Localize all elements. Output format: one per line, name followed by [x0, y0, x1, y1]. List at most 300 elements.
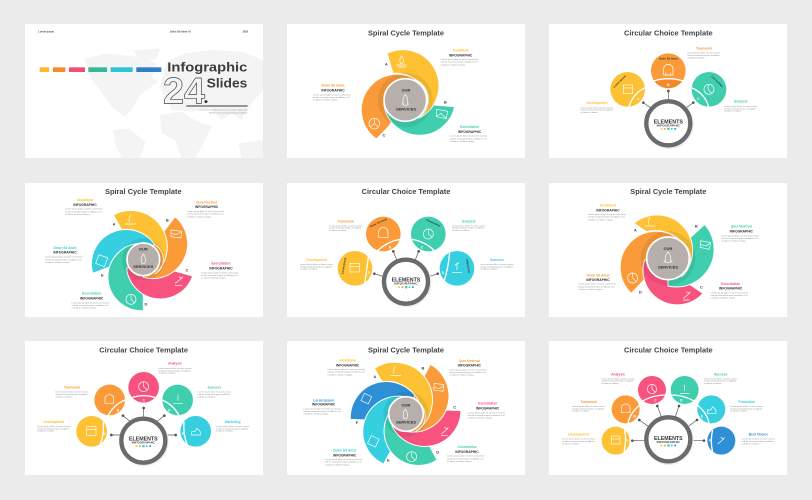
- text: Best Choice: Best Choice: [749, 433, 768, 437]
- text: Marketing: sed do eiusmod tempor incididunt: [216, 427, 249, 430]
- option circles: D: [168, 408, 171, 412]
- header labels: 2020: [242, 31, 249, 34]
- heading: Infographic Slides: [167, 60, 247, 91]
- text: Teamwork: [55, 386, 90, 398]
- text: Analysis: Analysis: [462, 219, 476, 223]
- letters: B: [166, 217, 169, 222]
- letters: A: [634, 228, 637, 233]
- text: Analysis: [724, 100, 758, 113]
- text: Success: ut labore et dolore: [704, 382, 722, 385]
- text: Exercitation: Exercitation: [478, 402, 497, 406]
- center ring: [382, 258, 431, 307]
- text: Exercitation: [450, 125, 488, 143]
- option circles: D: [680, 398, 683, 402]
- text: Incididunt: INFOGRAPHIC: [336, 363, 360, 367]
- text: Quis Nostrud: INFOGRAPHIC: [730, 229, 754, 233]
- option circles: F: [709, 439, 711, 443]
- text: Teamwork: [687, 46, 722, 59]
- letters: E: [387, 457, 390, 462]
- text: Marketing: Marketing: [225, 420, 241, 424]
- text: Teamwork: sed do eiusmod tempor incididunt: [55, 393, 88, 396]
- text: Development: Development: [568, 433, 590, 437]
- text: Success: [198, 386, 232, 398]
- title: Spiral Cycle Template: [630, 187, 706, 196]
- text: Exercitation: Lorem ipsum dolor sit amet consectetur: [468, 411, 506, 414]
- text: Teamwork: ut labore et dolore: [55, 395, 74, 398]
- center circle: [647, 237, 689, 280]
- text: Analysis: [158, 362, 193, 375]
- text: Analysis: sed do eiusmod tempor incididunt: [452, 227, 485, 230]
- text: Quis Nostrud: sed do eiusmod tempor incididunt ut la: [449, 371, 487, 374]
- text: Analysis: [601, 372, 636, 385]
- icons: [369, 56, 448, 129]
- text: Consectetur: sed do eiusmod tempor incididunt ut la: [447, 457, 485, 460]
- text: Quis Nostrud: ut labore et dolore magna: [721, 240, 747, 243]
- text: Incididunt: [588, 203, 626, 221]
- text: Best Choice: sed do eiusmod tempor incididunt: [742, 440, 774, 443]
- text: Quis Nostrud: ut labore et dolore magna: [187, 215, 212, 218]
- text: Development: Development: [306, 258, 328, 262]
- letters: D: [145, 301, 148, 306]
- text: Promotion: Promotion: [738, 400, 755, 404]
- option circles: B: [667, 83, 670, 87]
- option circles: Dolor Sit Amet: [369, 217, 387, 228]
- text: Success: sed do eiusmod tempor incididunt: [480, 265, 513, 268]
- text: Exercitation teal: Exercitation: [82, 292, 101, 296]
- letters: B: [695, 223, 698, 228]
- title: Circular Choice Template: [624, 345, 713, 354]
- text: Incididunt: sed do eiusmod tempor incididunt ut la: [441, 61, 478, 64]
- text: Exercitation: sed do eiusmod tempor incididunt ut la: [711, 294, 748, 297]
- text: Success: Lorem ipsum dolor sit amet consec: [198, 391, 232, 394]
- text: Consectetur: INFOGRAPHIC: [455, 450, 479, 454]
- text: Teamwork: Teamwork: [696, 46, 712, 50]
- text: Lorem Ipsum: [304, 398, 342, 416]
- text: Exercitation: sed do eiusmod tempor incididunt ut la: [468, 414, 505, 417]
- rule and subtitle: [186, 105, 248, 114]
- text: Teamwork: sed do eiusmod tempor incididunt: [329, 227, 362, 230]
- text: Development: Development: [587, 101, 608, 105]
- text: Success: Success: [208, 386, 221, 390]
- text: Incididunt: INFOGRAPHIC: [449, 54, 473, 58]
- text: Incididunt: [65, 198, 103, 216]
- text: Exercitation: ut labore et dolore magna: [468, 417, 493, 420]
- text: Exercitation: Lorem ipsum dolor sit amet consectetur: [711, 291, 749, 294]
- text: Development: [37, 420, 71, 433]
- text: Success: sed do eiusmod tempor incididunt: [198, 393, 230, 396]
- text: Incididunt: sed do eiusmod tempor incididunt ut la: [328, 371, 365, 374]
- icons: [361, 366, 448, 462]
- center ring: INFOGRAPHIC: [132, 442, 155, 445]
- text: Analysis: ut labore et dolore: [158, 372, 177, 375]
- text: Exercitation: Lorem ipsum dolor sit amet consectetur: [450, 135, 488, 138]
- rule and subtitle: Mollit sed do eiusmod tempor incididunt: [209, 111, 248, 114]
- text: Exercitation: ut labore et dolore magna: [711, 297, 736, 300]
- text: Lorem Ipsum: Lorem Ipsum: [313, 398, 334, 402]
- option circles: [338, 217, 474, 286]
- letters: A: [113, 222, 116, 227]
- text: Quis Nostrud: INFOGRAPHIC: [458, 364, 482, 368]
- text: Success: Success: [714, 372, 728, 376]
- option circles: C: [142, 398, 145, 402]
- text: Teamwork: Lorem ipsum dolor sit amet consec: [687, 52, 722, 55]
- text: Incididunt: ut labore et dolore magna: [441, 63, 466, 66]
- text: Incididunt: ut labore et dolore magna: [65, 213, 90, 216]
- text: Incididunt: Incididunt: [77, 198, 94, 202]
- text: Teamwork: Teamwork: [338, 219, 354, 223]
- text: Lorem Ipsum: Lorem ipsum dolor sit amet consectetur: [304, 407, 342, 410]
- text: Incididunt: [328, 358, 366, 376]
- option circles: Consectetur: [426, 218, 441, 228]
- letters: C: [186, 267, 189, 272]
- text: Dolor Sit Amet: [578, 273, 616, 291]
- text: Success: [480, 258, 515, 271]
- text: Dolor Sit Amet: sed do eiusmod tempor incididunt ut la: [45, 258, 83, 261]
- text: Analysis: [452, 219, 486, 232]
- text: Exercitation: [201, 262, 239, 280]
- text: Incididunt: sed do eiusmod tempor incididunt ut la: [65, 210, 103, 213]
- text: Success: Lorem ipsum dolor sit amet consec: [704, 377, 738, 380]
- option circles: B: [633, 414, 636, 418]
- text: Dolor Sit Amet: INFOGRAPHIC: [586, 278, 610, 282]
- center ring: [644, 416, 694, 465]
- text: Exercitation teal: INFOGRAPHIC: [80, 296, 104, 300]
- panel: circular choice four options: [287, 183, 525, 317]
- text: Quis Nostrud: Quis Nostrud: [459, 359, 480, 363]
- center circle: SERVICES: [658, 265, 678, 270]
- text: Teamwork: Lorem ipsum dolor sit amet consec: [329, 224, 363, 227]
- text: Quis Nostrud: sed do eiusmod tempor incididunt ut la: [187, 213, 224, 216]
- letters: A: [374, 374, 377, 379]
- option circles: [602, 376, 735, 455]
- text: Promotion: Lorem ipsum dolor sit amet consec: [730, 405, 764, 408]
- text: Quis Nostrud: [449, 359, 487, 377]
- panel: circular choice three options: [549, 24, 787, 158]
- option circles: D: [442, 271, 445, 275]
- option circles: A: [625, 439, 628, 443]
- text: Incididunt: INFOGRAPHIC: [596, 208, 620, 212]
- option circles: Consectetur: [710, 74, 724, 88]
- text: Incididunt: INFOGRAPHIC: [73, 203, 97, 207]
- option circles: Lorem Ipsum: [612, 74, 627, 89]
- icons: [628, 217, 711, 300]
- title: Spiral Cycle Template: [368, 29, 444, 38]
- text: Teamwork: sed do eiusmod tempor incididunt: [687, 54, 720, 57]
- text: Marketing: ut labore et dolore: [216, 430, 234, 433]
- text: Marketing: Lorem ipsum dolor sit amet consec: [216, 425, 250, 428]
- connectors: [642, 90, 695, 108]
- panel: circular choice six options: [549, 341, 787, 475]
- header labels: Dolor Sit Amet Ut: [170, 31, 191, 34]
- text: Exercitation teal: sed do eiusmod tempor incididunt ut la: [72, 304, 109, 307]
- panel: spiral cycle six steps: [287, 341, 525, 475]
- option circles: C: [421, 245, 424, 249]
- text: Development: sed do eiusmod tempor incididunt: [300, 265, 333, 268]
- text: Exercitation: Exercitation: [211, 262, 231, 266]
- center circle: SERVICES: [396, 106, 416, 111]
- text: Teamwork: Teamwork: [64, 386, 80, 390]
- text: Teamwork: ut labore et dolore: [572, 410, 590, 413]
- text: Incididunt: Lorem ipsum dolor sit amet consectetur: [588, 213, 626, 216]
- center ring: ELEMENTS: [654, 436, 683, 442]
- center ring: ELEMENTS: [129, 437, 158, 443]
- option circles: A: [637, 97, 640, 101]
- option circles: C: [654, 398, 657, 402]
- letters: [101, 217, 189, 306]
- text: Development: [580, 101, 615, 114]
- text: Exercitation: ut labore et dolore magna: [450, 140, 475, 143]
- text: Development: sed do eiusmod tempor incididunt: [37, 427, 70, 430]
- text: Exercitation: Exercitation: [460, 125, 479, 129]
- text: Success: ut labore et dolore: [198, 395, 216, 398]
- text: Quis Nostrud: ut labore et dolore magna: [449, 374, 475, 377]
- text: Dolor Sit Amet: sed do eiusmod tempor incididunt ut la: [313, 96, 351, 99]
- panel: spiral cycle five steps: [25, 183, 263, 317]
- text: Development: [562, 433, 596, 445]
- text: Lorem Ipsum: sed do eiusmod tempor incididunt ut la: [304, 410, 341, 413]
- option circles: E: [182, 432, 185, 436]
- text: Teamwork: Lorem ipsum dolor sit amet consec: [55, 391, 90, 394]
- text: Development: ut labore et dolore: [580, 111, 599, 114]
- text: Development: ut labore et dolore: [37, 430, 55, 433]
- text: Exercitation: INFOGRAPHIC: [209, 266, 233, 270]
- text: Teamwork: Teamwork: [581, 400, 597, 404]
- text: Exercitation: [711, 282, 749, 300]
- text: Quis Nostrud: [721, 225, 759, 243]
- text: Dolor Sit Amet: Lorem ipsum dolor sit amet consectetur: [313, 93, 351, 96]
- text: Dolor Sit Amet: Dolor Sit Amet: [333, 449, 357, 453]
- text: Marketing: [216, 420, 250, 433]
- title: Circular Choice Template: [99, 345, 188, 354]
- text: Teamwork: [572, 400, 606, 413]
- text: Teamwork: [329, 219, 363, 232]
- text: Dolor Sit Amet: sed do eiusmod tempor incididunt ut la: [325, 461, 362, 464]
- letters: [356, 366, 456, 462]
- text: Analysis: sed do eiusmod tempor incididunt: [724, 107, 757, 110]
- spiral petals: [91, 210, 193, 311]
- text: Incididunt: ut labore et dolore magna: [328, 373, 353, 376]
- option circles: B: [117, 408, 120, 412]
- text: Promotion: ut labore et dolore: [730, 410, 748, 413]
- spiral petals: [361, 50, 455, 139]
- text: Dolor Sit Amet: Dolor Sit Amet: [53, 246, 77, 250]
- text: Incididunt: sed do eiusmod tempor incididunt ut la: [588, 216, 626, 219]
- number 24 outline: 24: [163, 69, 205, 111]
- text: Dolor Sit Amet: INFOGRAPHIC: [321, 89, 345, 93]
- text: Best Choice: Lorem ipsum dolor sit amet consec: [742, 438, 776, 441]
- text: Quis Nostrud: Quis Nostrud: [196, 200, 217, 204]
- center circle: OUR: [139, 246, 148, 251]
- letters: C: [700, 284, 703, 289]
- text: Dolor Sit Amet: INFOGRAPHIC: [53, 251, 77, 255]
- option circles: Adipiscing: [465, 259, 472, 273]
- text: Quis Nostrud: Quis Nostrud: [731, 225, 752, 229]
- text: Consectetur: Consectetur: [457, 445, 477, 449]
- option circles: B: [389, 245, 392, 249]
- letters: F: [356, 420, 359, 425]
- center circle: [127, 243, 160, 276]
- text: Promotion: sed do eiusmod tempor incididunt: [730, 407, 763, 410]
- title: Circular Choice Template: [624, 29, 713, 38]
- title: Spiral Cycle Template: [368, 345, 444, 354]
- text: Development: Lorem ipsum dolor sit amet consec: [37, 425, 71, 428]
- text: Dolor Sit Amet: Lorem ipsum dolor sit amet consectetur: [578, 283, 616, 286]
- text: Exercitation: [468, 402, 506, 420]
- text: Promotion: [730, 400, 764, 413]
- heading: Infographic Slides: Infographic: [167, 60, 247, 75]
- center ring: ELEMENTS: [392, 278, 421, 284]
- text: Quis Nostrud: INFOGRAPHIC: [195, 205, 219, 209]
- letters: B: [422, 366, 425, 371]
- text: Exercitation teal: Lorem ipsum dolor sit amet consectetur: [72, 301, 110, 304]
- text: Exercitation: INFOGRAPHIC: [476, 407, 500, 411]
- text: Teamwork: sed do eiusmod tempor incididunt: [572, 407, 605, 410]
- option circles: A: [367, 270, 370, 274]
- text: Dolor Sit Amet: INFOGRAPHIC: [333, 453, 357, 457]
- text: Exercitation: Lorem ipsum dolor sit amet consectetur: [201, 271, 239, 274]
- text: Analysis: sed do eiusmod tempor incididunt: [601, 380, 634, 383]
- text: Dolor Sit Amet: ut labore et dolore magna: [325, 463, 350, 466]
- text: Dolor Sit Amet: ut labore et dolore magna: [313, 99, 338, 102]
- letters: C: [453, 404, 456, 409]
- center ring: INFOGRAPHIC: [657, 124, 680, 127]
- text: Incididunt: Incididunt: [453, 49, 469, 53]
- text: Best Choice: ut labore et dolore: [742, 442, 760, 445]
- title: Circular Choice Template: [362, 187, 450, 196]
- text: Analysis: ut labore et dolore: [601, 382, 620, 385]
- text: Analysis: ut labore et dolore: [452, 229, 470, 232]
- colored bars: [40, 67, 161, 72]
- option circles: [76, 372, 211, 447]
- text: Dolor Sit Amet: Lorem ipsum dolor sit amet consectetur: [325, 458, 363, 461]
- letters: [383, 62, 447, 137]
- text: Development: Development: [43, 420, 65, 424]
- text: Exercitation teal: [72, 292, 110, 310]
- text: Analysis: Lorem ipsum dolor sit amet consec: [724, 105, 758, 108]
- text: Dolor Sit Amet: Lorem ipsum dolor sit amet consectetur: [45, 256, 83, 259]
- text: Quis Nostrud: sed do eiusmod tempor incididunt ut la: [721, 237, 759, 240]
- header labels: Lorem ipsum: [38, 31, 55, 34]
- center ring: [119, 417, 169, 466]
- text: Exercitation: sed do eiusmod tempor incididunt ut la: [450, 137, 487, 140]
- text: Best Choice: [742, 433, 776, 445]
- text: Analysis: Lorem ipsum dolor sit amet consec: [158, 367, 193, 370]
- text: Success: Success: [490, 258, 504, 262]
- text: Exercitation: Exercitation: [721, 282, 740, 286]
- text: Teamwork: ut labore et dolore: [329, 229, 347, 232]
- center circle: [384, 79, 427, 121]
- text: Teamwork: ut labore et dolore: [687, 56, 706, 59]
- connectors: [373, 250, 439, 277]
- text: Consectetur: Lorem ipsum dolor sit amet consectetur: [447, 455, 485, 458]
- text: Quis Nostrud: Lorem ipsum dolor sit amet consectetur: [721, 234, 759, 237]
- text: Teamwork: Lorem ipsum dolor sit amet consec: [572, 405, 606, 408]
- text: Dolor Sit Amet: ut labore et dolore magna: [45, 261, 70, 264]
- option circles: Lorem Ipsum: [340, 257, 347, 274]
- text: Dolor Sit Amet: [45, 246, 83, 264]
- center ring: INFOGRAPHIC: [394, 283, 418, 286]
- text: Incididunt: Lorem ipsum dolor sit amet consectetur: [441, 58, 479, 61]
- center ring: ELEMENTS: [654, 119, 683, 125]
- text: Analysis: Analysis: [734, 100, 748, 104]
- center ring: INFOGRAPHIC: [657, 441, 680, 444]
- text: Dolor Sit Amet: sed do eiusmod tempor incididunt ut la: [578, 285, 616, 288]
- text: Incididunt: Lorem ipsum dolor sit amet consectetur: [65, 208, 103, 211]
- connectors: [631, 405, 705, 442]
- text: Exercitation: INFOGRAPHIC: [719, 287, 743, 291]
- spiral petals: [350, 362, 461, 465]
- center circle: [389, 397, 423, 431]
- text: Success: ut labore et dolore: [480, 268, 498, 271]
- text: Exercitation: ut labore et dolore magna: [201, 277, 226, 280]
- letters: [634, 223, 703, 295]
- center circle: SERVICES: [133, 264, 154, 269]
- text: Quis Nostrud: [187, 200, 225, 218]
- option circles: C: [697, 97, 700, 101]
- text: Analysis: Lorem ipsum dolor sit amet consec: [452, 224, 486, 227]
- panel: spiral cycle four steps: [549, 183, 787, 317]
- text: Development: Lorem ipsum dolor sit amet consec: [562, 438, 596, 441]
- text: Exercitation: sed do eiusmod tempor incididunt ut la: [201, 274, 239, 277]
- text: Development: [300, 258, 334, 271]
- center circle: OUR: [664, 246, 673, 251]
- letters: E: [101, 272, 104, 277]
- spiral petals: [620, 215, 714, 305]
- text: Dolor Sit Amet: [313, 84, 351, 102]
- text: Analysis: Lorem ipsum dolor sit amet consec: [601, 377, 636, 380]
- text: Development: sed do eiusmod tempor incididunt: [580, 109, 613, 112]
- text: Success: sed do eiusmod tempor incididunt: [704, 380, 737, 383]
- letters: B: [444, 99, 447, 104]
- text: Analysis: sed do eiusmod tempor incididunt: [158, 369, 191, 372]
- connectors: [110, 407, 177, 436]
- text: Incididunt: Incididunt: [340, 358, 356, 362]
- title: Spiral Cycle Template: [105, 187, 182, 196]
- center circle: SERVICES: [396, 420, 416, 425]
- panel: cover slide: [25, 24, 263, 158]
- text: Development: Lorem ipsum dolor sit amet consec: [580, 106, 615, 109]
- center ring: [644, 100, 694, 149]
- text: Analysis: Analysis: [611, 372, 625, 376]
- text: Incididunt: Incididunt: [600, 203, 617, 207]
- text: Dolor Sit Amet: Dolor Sit Amet: [321, 84, 345, 88]
- text: Success: [704, 372, 738, 385]
- text: Quis Nostrud: Lorem ipsum dolor sit amet consectetur: [187, 210, 225, 213]
- letters: C: [383, 132, 386, 137]
- text: Lorem Ipsum: ut labore et dolore magna: [304, 413, 329, 416]
- text: Lorem Ipsum: INFOGRAPHIC: [312, 403, 336, 407]
- heading: Infographic Slides: Slides: [207, 76, 247, 91]
- text: Dolor Sit Amet: Dolor Sit Amet: [586, 273, 610, 277]
- text: Success: Lorem ipsum dolor sit amet consec: [480, 263, 515, 266]
- header labels: [38, 31, 249, 34]
- rule and subtitle: Lorem ipsum dolor sit amet consectetur adipiscing: [199, 109, 248, 112]
- text: Consectetur: ut labore et dolore magna: [447, 460, 472, 463]
- text: Development: ut labore et dolore: [562, 442, 580, 445]
- text: Analysis: Analysis: [168, 362, 182, 366]
- text: Incididunt: Lorem ipsum dolor sit amet consectetur: [328, 368, 366, 371]
- icons: [96, 215, 183, 304]
- letters: D: [639, 290, 642, 295]
- center circle: OUR: [402, 402, 411, 407]
- letters: A: [385, 62, 388, 67]
- option circles: Dolor Sit Amet: [659, 57, 678, 61]
- panel: spiral cycle three steps: [287, 24, 525, 158]
- text: Development: Lorem ipsum dolor sit amet consec: [300, 263, 334, 266]
- option circles: A: [103, 432, 106, 436]
- text: Analysis: ut labore et dolore: [724, 110, 742, 113]
- text: Development: sed do eiusmod tempor incididunt: [562, 440, 595, 443]
